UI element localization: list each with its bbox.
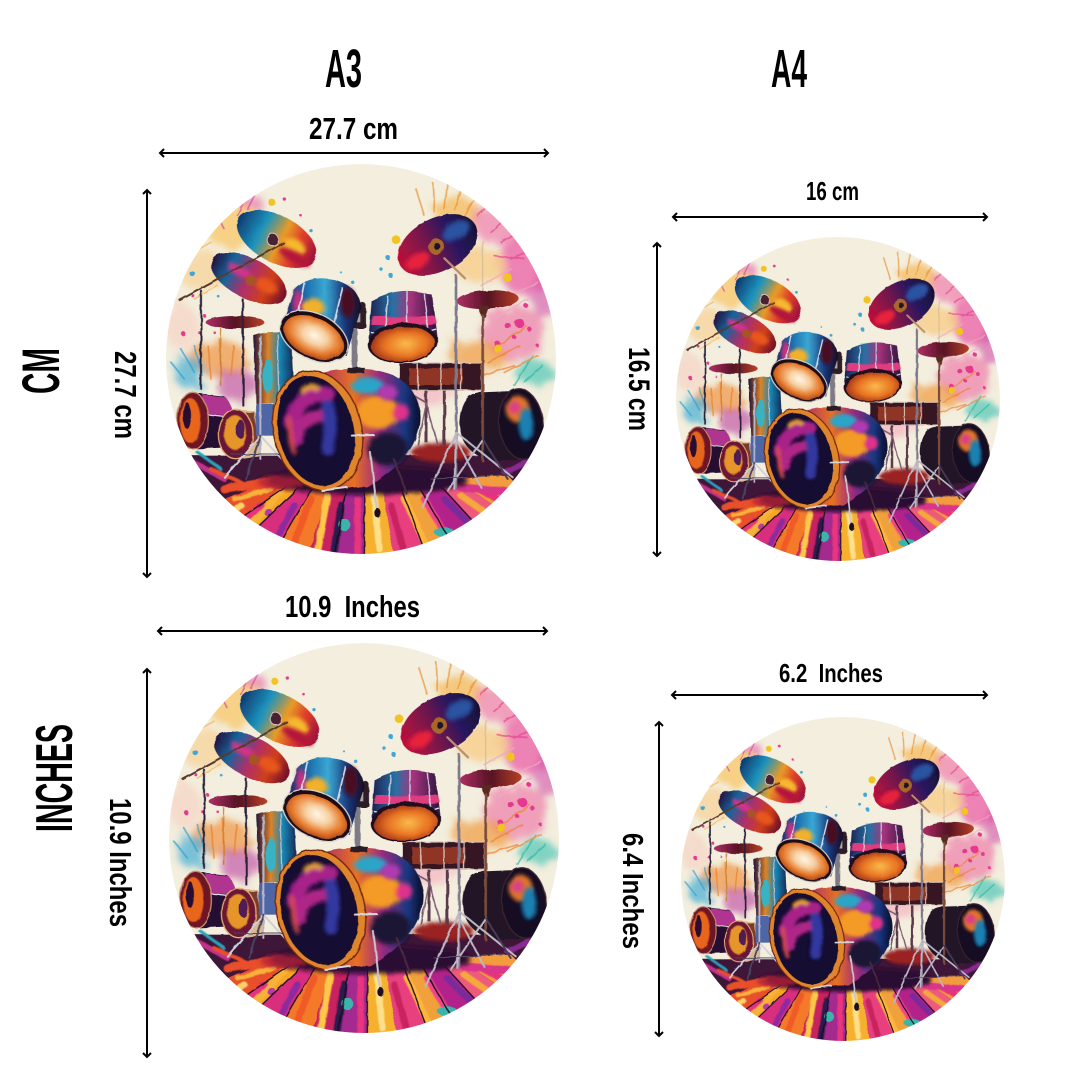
left cymbal boom arm (179, 234, 284, 300)
bass drum shell (318, 369, 420, 487)
row heading: CM: CM (12, 348, 71, 394)
right cymbal stands (423, 258, 513, 507)
label: A4 width in inches: 6.2 Inches (779, 658, 883, 688)
arrow: A4 width in inches (672, 691, 987, 699)
lower left crash cymbal (203, 242, 295, 315)
bass drum front head (260, 361, 375, 500)
arrow: A4 height in inches (655, 722, 663, 1036)
right mounted tom (366, 291, 439, 365)
column heading: A3: A3 (325, 39, 362, 99)
tall rack drum (254, 332, 294, 436)
label: A3 width in cm: 27.7 cm (309, 111, 398, 146)
disc: A4 centimetres drum kit artwork (616, 237, 1032, 565)
arrow: A4 width in cm (673, 213, 987, 221)
spray strokes and droplets (171, 182, 544, 386)
upper left crash cymbal (227, 198, 326, 280)
arrow: A3 width in inches (158, 627, 547, 635)
tom mount hardware (341, 302, 366, 373)
left hi-hat cymbal (206, 316, 264, 329)
arrow: A3 height in inches (143, 669, 151, 1057)
label: A4 height in cm: 16.5 cm (622, 347, 655, 431)
arrow: A4 height in cm (653, 243, 661, 556)
wooden floor planks (94, 442, 594, 559)
left cymbal stands (201, 291, 291, 479)
label: A4 width in cm: 16 cm (806, 176, 859, 206)
disc: A3 centimetres drum kit artwork (166, 164, 556, 554)
upper right crash cymbal (387, 201, 488, 289)
right ride cymbal (456, 241, 519, 317)
canvas background (166, 164, 556, 554)
floor brush strokes (188, 452, 534, 556)
label: A3 height in inches: 10.9 Inches (103, 798, 138, 927)
snare drum (399, 363, 481, 446)
column heading: A4: A4 (771, 39, 807, 99)
disc: A4 inches drum kit artwork (621, 717, 1037, 1045)
bass drum (260, 361, 420, 500)
disc: A3 inches drum kit artwork (97, 643, 597, 1038)
left floor tom (177, 392, 235, 449)
bass drum legs and pedal (370, 452, 407, 518)
label: A3 height in cm: 27.7 cm (108, 351, 143, 439)
right floor drum (459, 387, 547, 461)
left mounted tom (271, 278, 361, 372)
row heading: INCHES: INCHES (26, 724, 84, 832)
label: A3 width in inches: 10.9 Inches (285, 589, 420, 624)
arrow: A3 width in cm (160, 149, 548, 157)
label: A4 height in inches: 6.4 Inches (616, 833, 648, 949)
arrow: A3 height in cm (143, 190, 151, 577)
paint wash splashes (164, 194, 558, 407)
second left floor tom (218, 409, 261, 459)
